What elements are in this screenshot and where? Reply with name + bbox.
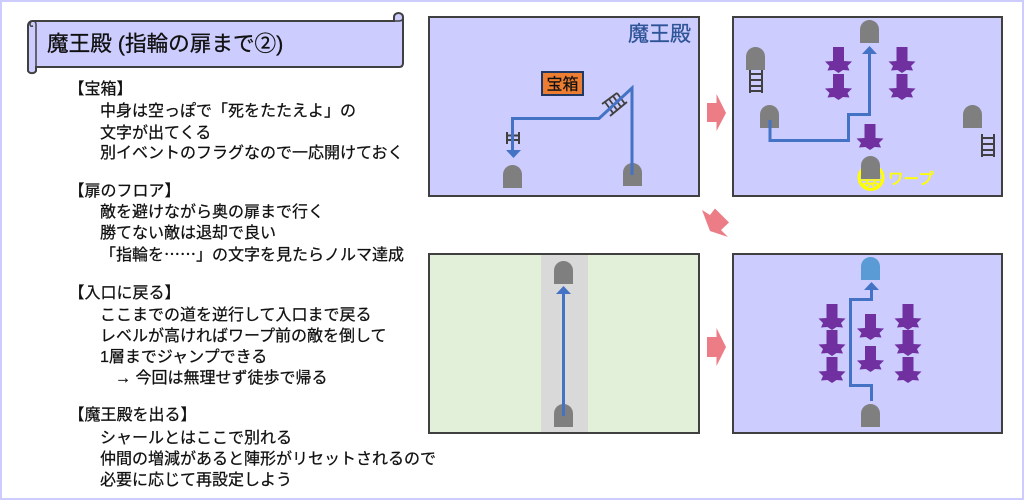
treasure chest box: 宝箱: [546, 76, 579, 94]
arrow: to lower left panel: [702, 208, 729, 237]
text block: return to entrance: 1層までジャンプできる: [100, 348, 267, 366]
text block: leave the castle: シャールとはここで別れる: [100, 429, 292, 447]
text block: door floor: [68, 183, 404, 265]
door: warp: [861, 156, 880, 179]
treasure chest box: [542, 72, 583, 95]
route arrow: [770, 46, 877, 140]
panel label: 魔王殿: [628, 23, 691, 46]
enemy: [857, 346, 884, 372]
door: left: [503, 165, 522, 188]
warp label: ワープ: [888, 170, 934, 188]
text block: treasure chest: 別イベントのフラグなので一応開けておく: [100, 144, 404, 162]
door: right: [623, 163, 642, 186]
enemy: [888, 74, 916, 100]
text block: return to entrance: 【入口に戻る】: [68, 285, 181, 302]
enemy: [825, 47, 852, 73]
enemy: [894, 304, 922, 330]
route arrow: [850, 282, 879, 401]
enemy: [888, 47, 916, 73]
door: bottom: [554, 404, 573, 427]
text block: leave the castle: [68, 406, 436, 489]
enemy: [825, 74, 852, 100]
icon: small ladder: [507, 132, 519, 144]
door: right: [963, 105, 982, 128]
warp hatch: [861, 180, 881, 188]
corridor: [541, 255, 588, 432]
door: top: [860, 20, 879, 43]
text block: return to entrance: レベルが高ければワープ前の敵を倒して: [100, 327, 387, 345]
text block: return to entrance: ここまでの道を逆行して入口まで戻る: [100, 306, 372, 324]
text block: return to entrance: [68, 285, 387, 387]
text block: treasure chest: 【宝箱】: [68, 80, 133, 98]
text block: treasure chest: 中身は空っぽで「死をたたえよ」の: [100, 102, 356, 120]
panel: exit corridor map: [429, 254, 699, 433]
text block: return to entrance: → 今回は無理せず徒歩で帰る: [115, 369, 327, 387]
enemy: [818, 330, 846, 356]
text block: door floor: 勝てない敵は退却で良い: [100, 224, 276, 242]
text block: treasure chest: 文字が出てくる: [100, 124, 211, 142]
arrow: to upper right panel: [707, 94, 726, 131]
panel: treasure room map: [429, 17, 699, 196]
enemy: [894, 330, 922, 356]
icon: diagonal ladder: [602, 93, 627, 116]
enemy: [818, 304, 846, 330]
door: blue goal: [861, 257, 880, 280]
enemy: [856, 124, 884, 150]
title scroll banner: [28, 13, 403, 73]
enemy: [857, 314, 884, 340]
text block: treasure chest: [68, 80, 404, 162]
enemy: [894, 357, 922, 383]
icon: ladder left: [750, 70, 762, 93]
text block: leave the castle: 必要に応じて再設定しよう: [100, 471, 292, 489]
icon: ladder right: [982, 134, 994, 157]
door: upper left: [746, 47, 765, 70]
text block: leave the castle: 【魔王殿を出る】: [68, 406, 197, 424]
route arrow: [506, 88, 632, 175]
route arrow: [556, 286, 571, 416]
door: top: [554, 261, 573, 284]
arrow: to lower right panel: [707, 328, 726, 366]
door: entry: [861, 404, 880, 427]
text block: door floor: 敵を避けながら奥の扉まで行く: [100, 203, 324, 221]
warp circle: [859, 166, 883, 190]
panel: final door map: [733, 254, 1002, 433]
title: 魔王殿 (指輪の扉まで②): [47, 31, 283, 56]
text block: door floor: 「指輪を……」の文字を見たらノルマ達成: [100, 241, 404, 265]
text block: leave the castle: 仲間の増減があると陣形がリセットされるので: [100, 450, 436, 468]
text block: door floor: 【扉のフロア】: [68, 183, 181, 200]
door: mid left: [760, 105, 779, 128]
enemy: [818, 357, 846, 383]
panel: door floor map: [733, 17, 1002, 196]
